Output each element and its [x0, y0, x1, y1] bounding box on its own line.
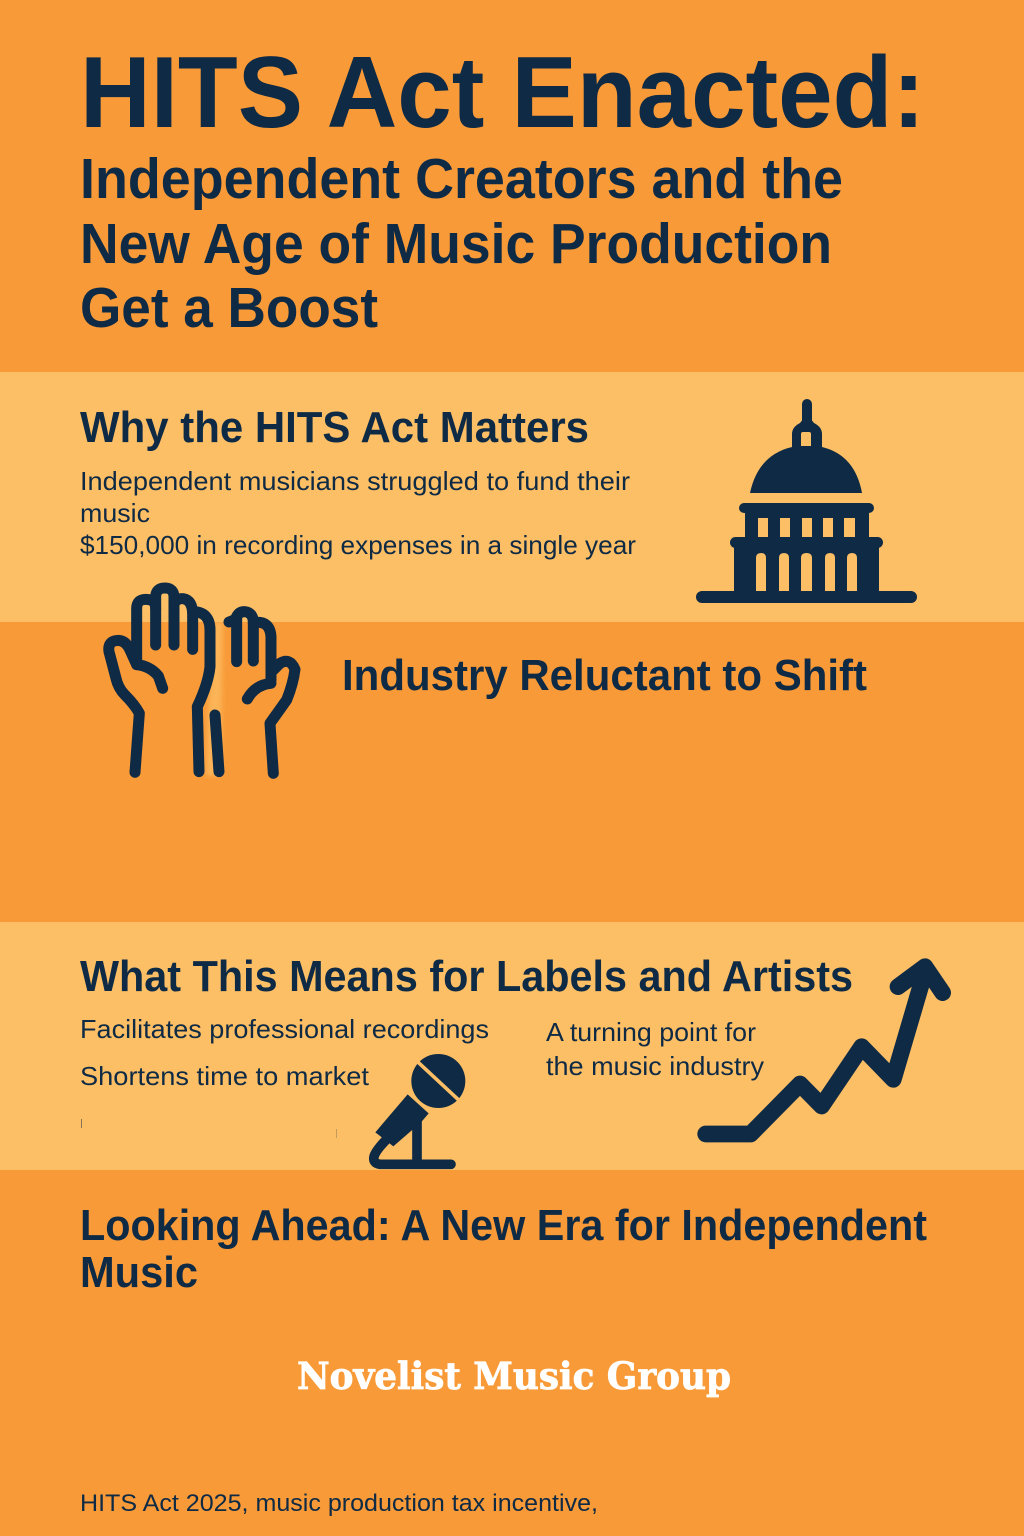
heading: what this means: What This Means for Labels and Artists: [80, 952, 853, 1001]
heading: looking ahead: Music: [80, 1248, 198, 1297]
text block: why it matters body: music: [80, 498, 150, 528]
subtitle: Independent Creators and the: [80, 147, 843, 211]
heading: industry reluctant to shift: Industry Reluctant to Shift: [342, 651, 867, 700]
panel: why the act matters background: [0, 372, 1024, 622]
text block: turning point: A turning point for: [546, 1017, 756, 1047]
text block: why it matters body: $150,000 in recording expenses in a single year: [80, 530, 636, 560]
chart: rising trend arrow: [706, 967, 943, 1134]
heading: why the HITS Act matters: Why the HITS Act Matters: [80, 403, 589, 452]
panel: labels and artists background: [0, 922, 1024, 1170]
heading: looking ahead: [80, 1201, 927, 1297]
icon: microphone: [374, 1054, 465, 1164]
panel: looking ahead background: [0, 1170, 1024, 1536]
text block: label benefits: [80, 1014, 489, 1091]
icon: raised hands: [109, 588, 295, 773]
text block: label benefits: Shortens time to market: [80, 1061, 370, 1091]
text block: turning point: [546, 1017, 764, 1081]
subtitle: Get a Boost: [80, 276, 378, 340]
text block: turning point: the music industry: [546, 1051, 764, 1081]
brand name: Novelist Music Group: [297, 1354, 731, 1398]
text block: why it matters body: Independent musicians struggled to fund their: [80, 466, 630, 496]
heading: looking ahead: Looking Ahead: A New Era for Independent: [80, 1201, 927, 1250]
text block: why it matters body: [80, 466, 636, 560]
panel: header background: [0, 0, 1024, 372]
title: HITS Act Enacted:: [80, 37, 925, 149]
keywords footer: HITS Act 2025, music production tax incentive,: [80, 1490, 598, 1517]
text block: label benefits: Facilitates professional recordings: [80, 1014, 489, 1044]
icon: capitol building: [696, 399, 917, 603]
subtitle: New Age of Music Production: [80, 212, 832, 276]
panel: industry reluctant background: [0, 622, 1024, 922]
subtitle: [80, 147, 843, 340]
